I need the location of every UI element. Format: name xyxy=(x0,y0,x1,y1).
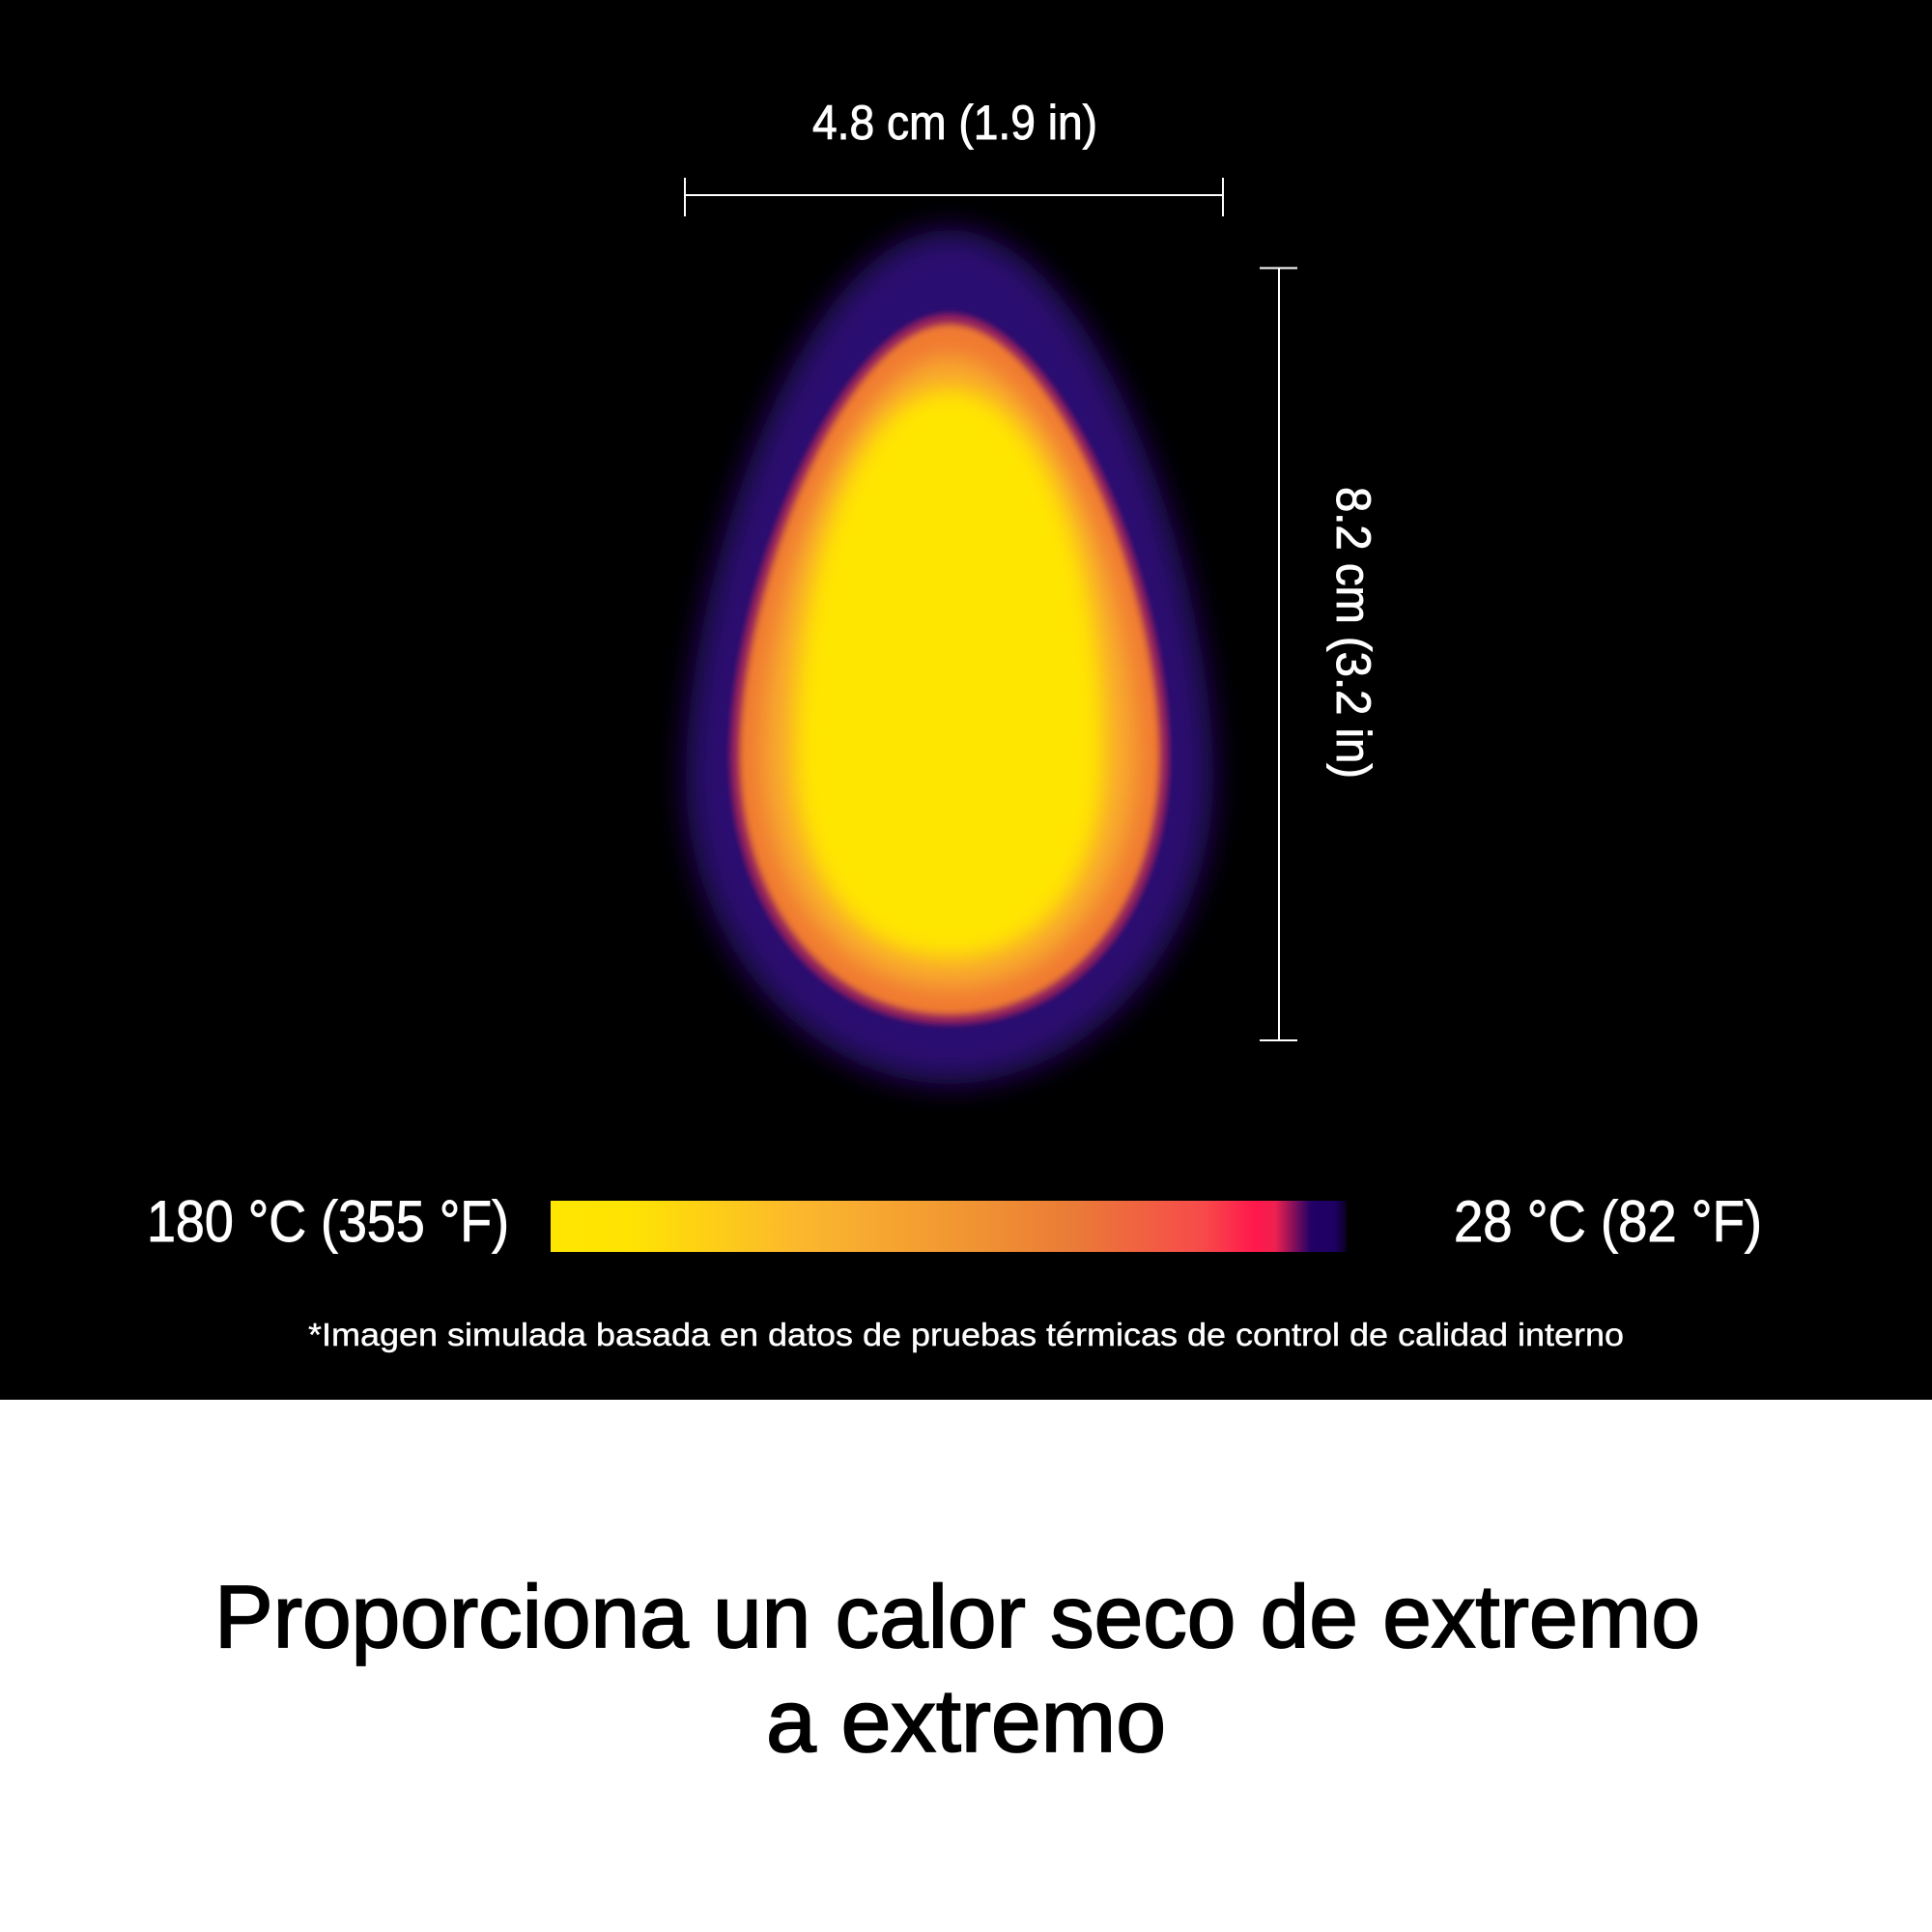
heading text xyxy=(214,1568,1700,1771)
white panel: heading xyxy=(0,1401,1932,1932)
label: width measurement: 4.8 cm (1.9 in) xyxy=(812,96,1097,150)
footnote: *Imagen simulada basada en datos de pruebas térmicas de control de calidad interno xyxy=(308,1317,1624,1352)
black panel: thermal image xyxy=(0,0,1932,1400)
bracket: width xyxy=(685,178,1223,216)
heading text: a extremo xyxy=(766,1672,1166,1771)
thermal egg heat map xyxy=(686,230,1213,1084)
heading text: Proporciona un calor seco de extremo xyxy=(214,1568,1700,1666)
label: height measurement: 8.2 cm (3.2 in) xyxy=(1326,487,1380,779)
label: minimum temperature: 28 °C (82 °F) xyxy=(1454,1189,1762,1254)
bracket: height xyxy=(1260,269,1297,1040)
label: maximum temperature: 180 °C (355 °F) xyxy=(147,1189,509,1254)
temperature scale bar xyxy=(551,1201,1347,1252)
